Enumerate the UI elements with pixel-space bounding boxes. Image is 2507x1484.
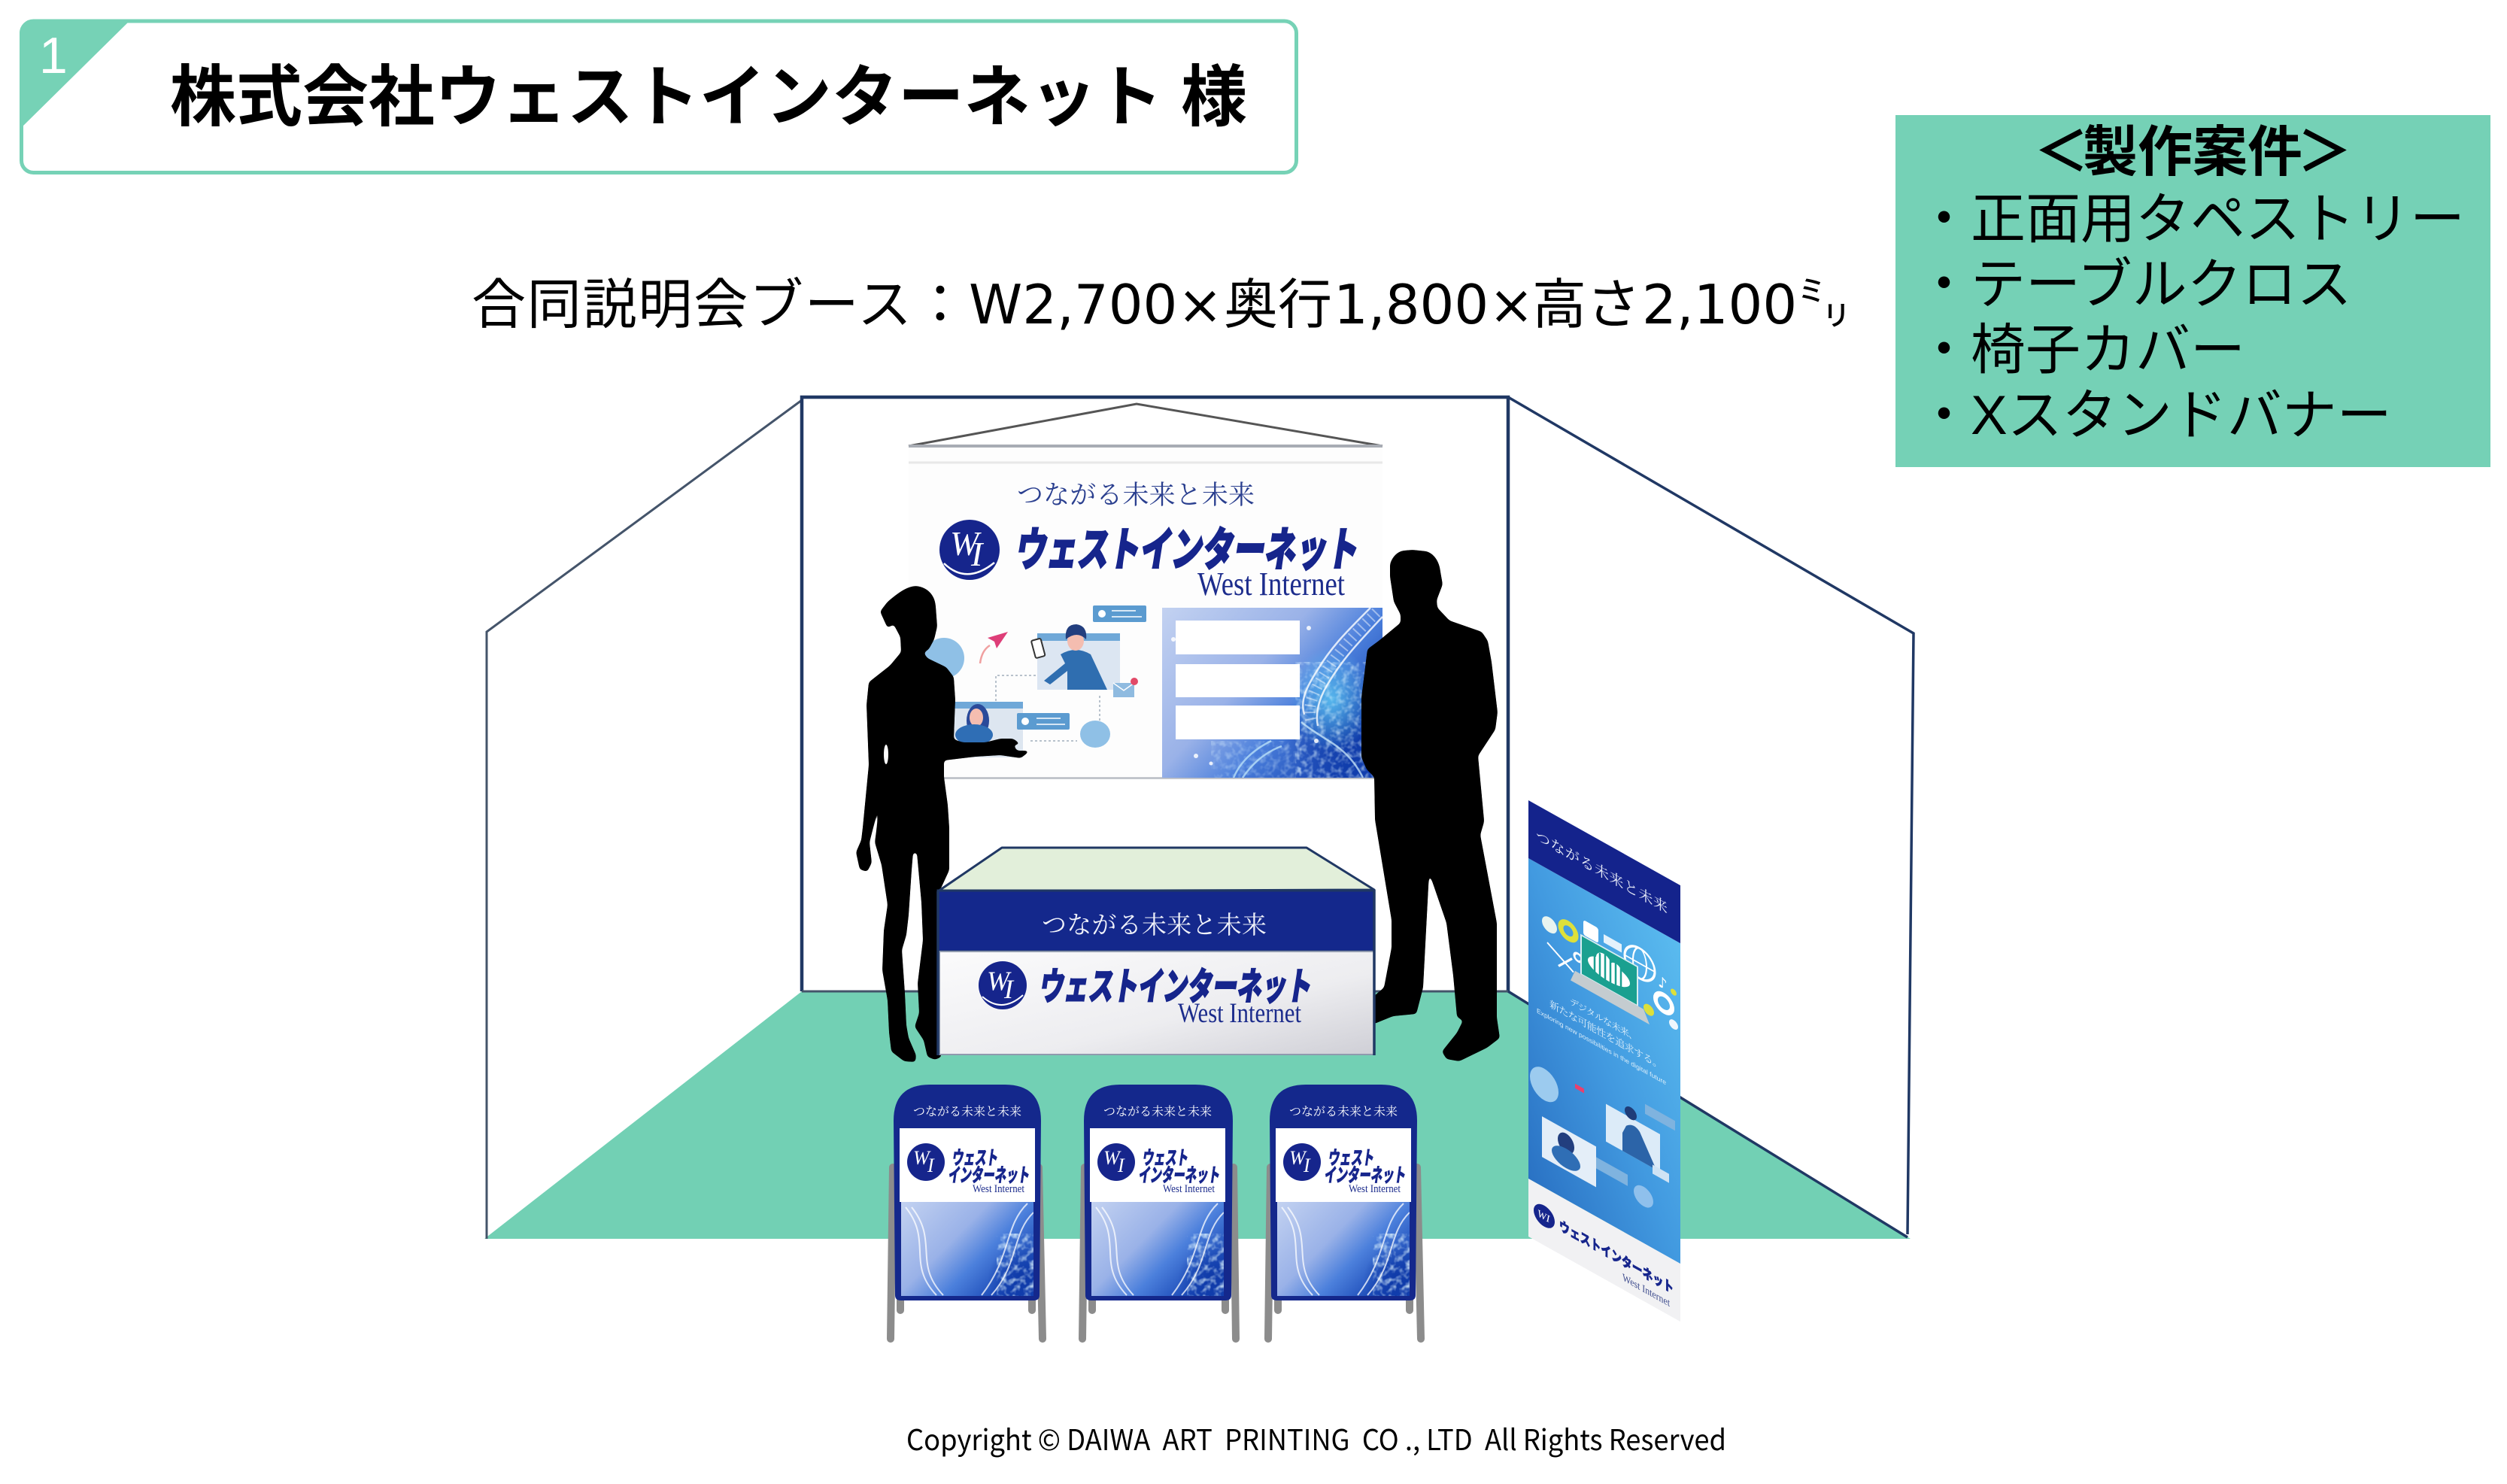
chair 3: W xyxy=(1289,1147,1307,1169)
front tapestry xyxy=(909,404,1410,797)
chair 1 xyxy=(891,1085,1055,1339)
reception table xyxy=(938,848,1374,1055)
banner logo footer: ウェストインターネット xyxy=(1559,1215,1674,1298)
chair 1: W xyxy=(913,1147,931,1169)
chair 2: W xyxy=(1103,1147,1121,1169)
item list: ・ xyxy=(1917,254,1971,315)
table wordmark: ウェストインターネット xyxy=(1036,957,1317,1011)
corner number tab: 1 xyxy=(39,27,68,84)
chair 2: ウェスト xyxy=(1141,1143,1191,1170)
tapestry tagline: つながる未来と未来 xyxy=(1017,475,1255,512)
chair 2: West Internet xyxy=(1163,1183,1216,1195)
table logo mark: W xyxy=(987,966,1012,996)
logo mark xyxy=(939,520,1000,580)
booth size caption: 2,100 xyxy=(1642,273,1797,336)
logo wordmark: ウェストインターネット xyxy=(1012,512,1365,579)
chair 1: West Internet xyxy=(973,1183,1025,1195)
item list: Xスタンドバナー xyxy=(1971,385,2392,446)
panel heading: ＞ xyxy=(2297,122,2352,183)
table tagline: つながる未来と未来 xyxy=(1042,906,1267,941)
table cloth white panel xyxy=(939,951,1374,1055)
banner header band xyxy=(1528,800,1680,943)
silhouette: woman xyxy=(856,586,1030,1062)
chair 3: West Internet xyxy=(1349,1183,1401,1195)
booth size caption: W2,700× xyxy=(969,273,1223,336)
chair 1: つながる未来と未来 xyxy=(913,1102,1021,1119)
chair 3: つながる未来と未来 xyxy=(1289,1102,1398,1119)
logo english: West Internet xyxy=(1197,566,1345,602)
banner logo footer: WI xyxy=(1537,1208,1550,1226)
banner copy: Exploring new possibilities in the digital future xyxy=(1537,1007,1666,1086)
booth size caption: 1,800× xyxy=(1334,273,1534,336)
panel: production items xyxy=(1895,115,2490,467)
X stand banner xyxy=(1528,800,1680,1322)
item list: テーブルクロス xyxy=(1971,254,2352,315)
blank white text boxes xyxy=(1176,621,1300,739)
chair 3: I xyxy=(1303,1155,1311,1176)
booth size caption: 合同説明会ブース xyxy=(472,273,913,336)
panel heading: ＜ xyxy=(2034,122,2089,183)
floor xyxy=(484,991,1911,1239)
booth size caption: ： xyxy=(913,273,967,336)
chair 1: ウェスト xyxy=(951,1143,1000,1170)
item list: ・ xyxy=(1917,385,1971,446)
item list: ・ xyxy=(1917,320,1971,381)
copyright: Copyright © DAIWA ART PRINTING CO ., LTD All Rights Reserved xyxy=(906,1417,1726,1458)
table logo mark xyxy=(979,961,1027,1009)
corner number tab xyxy=(20,21,129,129)
silhouette: man xyxy=(1361,550,1500,1061)
chair 2: つながる未来と未来 xyxy=(1103,1102,1212,1119)
item list xyxy=(1917,189,2465,446)
chair 3: ウェスト xyxy=(1327,1143,1376,1170)
banner illustration xyxy=(1530,1039,1675,1231)
item list: 椅子カバー xyxy=(1971,320,2245,381)
banner tech icons: ♪ xyxy=(1658,973,1668,995)
booth walls xyxy=(487,397,1914,1239)
booth size caption: 奥行 xyxy=(1224,273,1332,336)
table cloth navy band xyxy=(938,891,1374,951)
item list: 正面用タペストリー xyxy=(1971,189,2465,250)
table logo english: West Internet xyxy=(1178,998,1302,1029)
table top xyxy=(938,848,1374,891)
illustration: online communication xyxy=(924,605,1146,757)
item list: ・ xyxy=(1917,189,1971,250)
banner logo footer: West Internet xyxy=(1622,1272,1671,1310)
chair 3: インターネット xyxy=(1323,1161,1408,1188)
DNA graphic panel xyxy=(1162,608,1382,778)
logo mark: W xyxy=(950,524,982,563)
chair 2 xyxy=(1082,1085,1246,1339)
banner tech icons xyxy=(1542,894,1678,1040)
logo mark: I xyxy=(970,535,985,573)
chair 2: I xyxy=(1117,1155,1125,1176)
tapestry hanger xyxy=(909,404,1382,446)
banner header band: つながる未来と未来 xyxy=(1536,823,1668,918)
title text: 株式会社ウェストインターネット 様 xyxy=(170,59,1247,135)
chair 1: I xyxy=(927,1155,935,1176)
booth size caption: ㍉ xyxy=(1797,273,1851,336)
chair 2: インターネット xyxy=(1137,1161,1222,1188)
chair 3 xyxy=(1268,1085,1431,1339)
panel heading: 製作案件 xyxy=(2083,122,2302,183)
banner copy: デジタルな未来、 xyxy=(1570,994,1637,1045)
booth size caption: 高さ xyxy=(1532,273,1640,336)
table logo mark: I xyxy=(1003,974,1015,1004)
chair 1: インターネット xyxy=(947,1161,1032,1188)
title box xyxy=(20,21,1297,173)
banner copy: 新たな可能性を追求する。 xyxy=(1549,996,1662,1073)
banner logo footer xyxy=(1528,1179,1680,1322)
